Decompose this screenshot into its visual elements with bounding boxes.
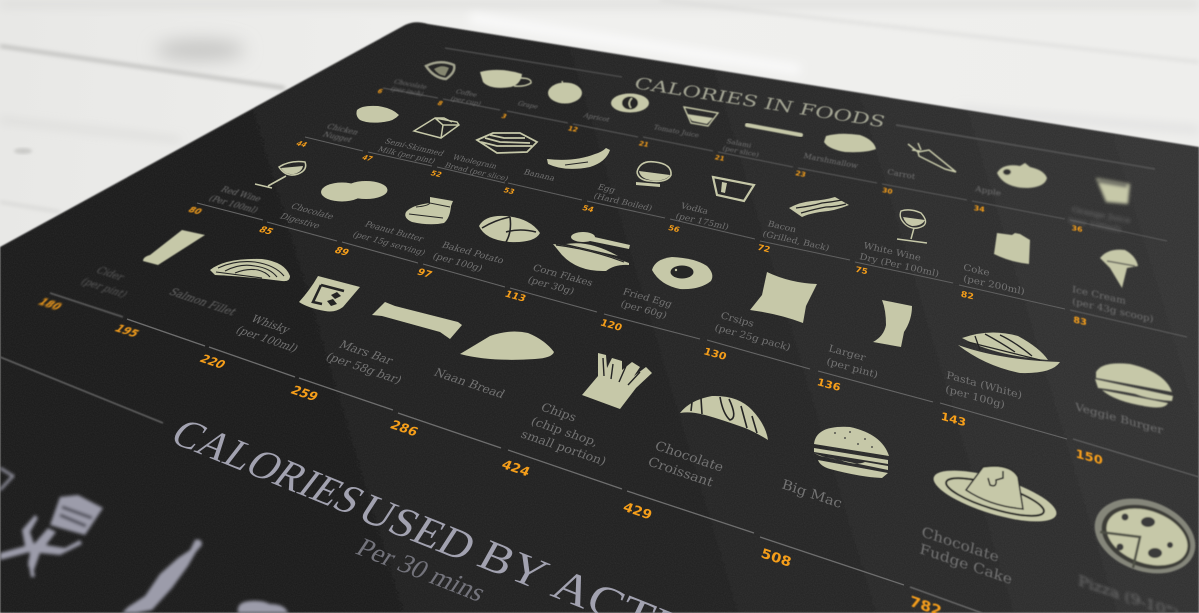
- row 3 calorie values: 120: [598, 318, 624, 334]
- icon: baked potato: [479, 216, 540, 242]
- label: white wine: White Wine: [862, 241, 922, 264]
- label: whisky: Whisky: [248, 313, 294, 336]
- icon: chocolate: [426, 62, 454, 79]
- row 4 calorie values: 220: [197, 352, 229, 371]
- row 1 calorie values: 34: [973, 204, 985, 214]
- label: chicken nugget: Nugget: [321, 130, 355, 144]
- label: bacon: Bacon: [766, 220, 798, 235]
- row 2 calorie values: 52: [429, 169, 444, 179]
- row 4 calorie values: 195: [111, 322, 143, 340]
- heading: calories used by activity: USED: [350, 486, 485, 570]
- icon: big mac: [814, 427, 889, 478]
- icon: carrot: [908, 143, 956, 172]
- icon: vodka glass: [713, 177, 754, 201]
- label: chips: [519, 400, 609, 468]
- row 4 calorie values: 180: [35, 296, 65, 313]
- row 4 calorie values: 286: [387, 418, 420, 440]
- icon: apricot: [611, 94, 649, 112]
- row 3 divider lines: [197, 203, 1199, 477]
- label: chocolate: Chocolate: [392, 78, 429, 91]
- row 4 calorie values: 508: [759, 546, 793, 571]
- row 2 calorie values: 47: [360, 153, 375, 163]
- label: chips: small portion): [519, 427, 609, 468]
- label: red wine: [206, 185, 263, 215]
- icon: office chair: [0, 495, 103, 577]
- label: coffee: Coffee: [454, 88, 479, 99]
- label: bacon: (Grilled, Back): [761, 229, 831, 253]
- row 2 calorie values: [294, 139, 1087, 328]
- label: crisps: (per 25g pack): [713, 323, 792, 353]
- heading: calories in foods: [445, 48, 1155, 169]
- label: cider: Cider: [93, 264, 129, 283]
- icon: activity figure fragment: [238, 601, 288, 613]
- icon: naan bread: [460, 332, 554, 360]
- label: chocolate croissant: [646, 439, 725, 490]
- label: white wine: Dry (Per 100ml): [858, 252, 940, 279]
- icon: veggie burger: [1095, 363, 1173, 408]
- row 3 calorie values: 113: [503, 289, 528, 304]
- icon: crisps packet: [750, 272, 817, 323]
- row 1 calorie values: 30: [882, 186, 893, 196]
- row 2 calorie values: 44: [294, 139, 309, 149]
- icon: pasta: [958, 332, 1060, 373]
- label: baked potato: Baked Potato: [439, 240, 506, 266]
- row 3 calorie values: [185, 206, 1103, 468]
- row 1 calorie values: [376, 88, 1083, 234]
- label: lager: (per pint): [825, 356, 879, 381]
- icon: orange juice glass: [1096, 178, 1130, 204]
- row 3 calorie values: 85: [256, 225, 275, 237]
- label: peanut butter: (per 15g serving): [350, 229, 428, 258]
- label: coffee: [449, 88, 483, 107]
- row 3 calorie values: 130: [702, 346, 728, 363]
- label: vodka: (per 175ml): [674, 211, 731, 232]
- label: salami: Salami: [725, 138, 753, 150]
- row 1 calorie values: 36: [1071, 224, 1083, 234]
- row 1 calorie values: 21: [714, 154, 726, 163]
- label: chips: Chips: [539, 400, 579, 424]
- label: coke: Coke: [963, 263, 990, 279]
- label: ice cream: Ice Cream: [1072, 285, 1126, 307]
- label: corn flakes: Corn Flakes: [531, 263, 595, 289]
- icon: bread stack: [477, 133, 537, 153]
- label: tomato juice: Tomato Juice: [652, 124, 700, 139]
- label: mars bar: Mars Bar: [336, 338, 396, 367]
- label: crisps: Crsips: [719, 311, 755, 330]
- row 2 calorie values: 54: [581, 204, 596, 214]
- icon: red wine: [255, 162, 306, 188]
- label: cider: [78, 264, 131, 300]
- row 4 calorie values: 429: [621, 501, 654, 523]
- label: banana: Banana: [522, 168, 557, 183]
- icon: egg in cup: [636, 162, 671, 187]
- label: naan bread: Naan Bread: [431, 366, 508, 401]
- label: chocolate digestive: Chocolate: [288, 202, 336, 222]
- label: lager: Larger: [827, 343, 867, 364]
- panel: food row 1: [376, 62, 1167, 241]
- label: salami: (per slice): [721, 145, 760, 159]
- label: chocolate croissant: Chocolate: [653, 439, 725, 475]
- icon: coffee cup: [480, 70, 531, 88]
- label: lager: [825, 343, 879, 381]
- row 1 calorie values: 8: [436, 100, 445, 107]
- heading rule: [0, 357, 163, 423]
- label: salmon fillet: Salmon Fillet: [166, 286, 240, 318]
- icon: peanut butter jar: [405, 197, 453, 224]
- icon: desk fragment: [0, 468, 13, 490]
- label: chips: (chip shop,: [529, 414, 601, 449]
- icon: cider glass: [143, 230, 205, 265]
- label: wholegrain bread: Wholegrain: [451, 153, 499, 170]
- label: coke: [963, 263, 1025, 297]
- icon: white wine: [897, 210, 927, 243]
- label: orange juice: [1068, 205, 1131, 234]
- icon: banana: [547, 148, 610, 169]
- label: vodka: Vodka: [678, 202, 710, 217]
- row 1 calorie values: 6: [376, 88, 385, 95]
- label: mars bar: (per 58g bar): [323, 350, 405, 386]
- icon: standing person: [122, 540, 202, 613]
- row 4 calorie values: 259: [287, 384, 321, 405]
- icon: tomato juice: [684, 107, 718, 126]
- label: carrot: Carrot: [887, 168, 917, 181]
- label: chocolate fudge cake: Chocolate: [920, 523, 1000, 566]
- label: fried egg: Fried Egg: [621, 287, 674, 310]
- row 4 calorie values: [35, 296, 943, 613]
- row 2 calorie values: 53: [502, 186, 516, 196]
- panel: calories used by activity: [0, 357, 678, 613]
- label: chocolate digestive: [277, 202, 336, 231]
- row 4 divider lines: [50, 293, 982, 613]
- label: baked potato: [430, 240, 506, 274]
- icon: salami: [747, 125, 801, 135]
- row 2 calorie values: 75: [854, 264, 869, 276]
- heading: calories used by activity: CALORIES: [162, 411, 374, 523]
- heading: calories used by activity: [162, 411, 678, 613]
- label: semi-skimmed milk: [376, 137, 446, 165]
- label: peanut butter: Peanut Butter: [362, 220, 426, 244]
- icon: corn flakes bowl and spoon: [553, 232, 630, 271]
- label: chicken nugget: [321, 122, 361, 144]
- panel: food row 2: [294, 106, 1187, 337]
- label: orange juice: Orange Juice: [1072, 205, 1131, 225]
- icon: apple: [997, 163, 1047, 188]
- row 2 calorie values: 82: [960, 290, 974, 302]
- icon: chips: [582, 353, 652, 409]
- icon: mars bar: [372, 302, 462, 339]
- icon: chocolate digestive: [321, 181, 388, 202]
- label: cider: (per pint): [78, 275, 131, 300]
- label: ice cream: [1072, 285, 1154, 325]
- label: fried egg: [619, 287, 674, 321]
- label: veggie burger: Veggie Burger: [1074, 400, 1164, 437]
- label: big mac: Big Mac: [780, 477, 844, 512]
- label: apple: Apple: [974, 183, 1002, 198]
- label: chocolate croissant: Croissant: [646, 455, 716, 490]
- icon: fried egg: [652, 257, 712, 289]
- label: chocolate digestive: Digestive: [277, 212, 322, 231]
- icon: grape: [548, 81, 582, 104]
- label: ice cream: (per 43g scoop): [1072, 297, 1154, 325]
- row 2 divider lines: [305, 137, 1187, 337]
- label: wholegrain bread: Bread (per slice): [443, 161, 510, 183]
- row 1 calorie values: 3: [500, 112, 508, 120]
- label: baked potato: (per 100g): [430, 251, 485, 274]
- label: grape: Grape: [516, 100, 540, 111]
- label: marshmallow: Marshmallow: [802, 152, 860, 170]
- label: coke: (per 200ml): [963, 274, 1025, 297]
- icon: salmon fillet: [210, 259, 290, 281]
- label: coffee: (per cup): [449, 95, 483, 107]
- label: chocolate fudge cake: Fudge Cake: [918, 540, 1014, 588]
- panel: food row 4: [35, 230, 1199, 613]
- label: semi-skimmed milk: Semi-Skimmed: [383, 137, 446, 158]
- label: pasta: Pasta (White): [946, 369, 1023, 401]
- icon: marshmallow: [824, 134, 876, 152]
- label: egg hard boiled: (Hard Boiled): [592, 191, 654, 213]
- icon: whisky glass: [299, 276, 360, 312]
- row 3 calorie values: 80: [185, 206, 204, 217]
- subheading: per 30 mins: Per 30 mins: [350, 533, 492, 608]
- label: egg hard boiled: Egg: [596, 182, 618, 195]
- row 3 calorie values: 143: [940, 410, 967, 429]
- row 1 calorie values: 21: [637, 140, 650, 149]
- label: corn flakes: (per 30g): [526, 275, 576, 297]
- label: red wine: Red Wine: [218, 185, 263, 204]
- row 3 calorie values: 136: [816, 376, 842, 394]
- icon: coke can: [994, 233, 1030, 264]
- icon: ice cream: [1100, 250, 1138, 288]
- label: fried egg: (per 60g): [619, 299, 668, 321]
- row 1 calorie values: 23: [794, 169, 807, 179]
- label: pasta: (per 100g): [945, 383, 1006, 411]
- row 3 calorie values: 89: [332, 246, 351, 258]
- row 4 calorie values: 424: [499, 458, 532, 480]
- label: semi-skimmed milk: Milk (per pint): [376, 145, 437, 165]
- label: chocolate: (per inch): [389, 85, 426, 98]
- panel: food row 3: [185, 162, 1199, 477]
- icon: chicken nugget: [356, 106, 399, 123]
- row 2 calorie values: 72: [756, 243, 771, 255]
- row 1 calorie values: 12: [566, 125, 580, 134]
- icon: bacon: [789, 197, 849, 217]
- label: chicken nugget: Chicken: [325, 122, 361, 136]
- row 3 calorie values: 97: [415, 267, 434, 280]
- label: red wine: (Per 100ml): [206, 194, 261, 215]
- icon: milk carton: [414, 118, 459, 138]
- row 1 divider lines: [383, 88, 1167, 241]
- label: vodka: [674, 202, 731, 232]
- row 2 calorie values: 83: [1073, 315, 1087, 328]
- label: chocolate: [389, 78, 429, 98]
- icon: croissant: [680, 396, 768, 440]
- label: orange juice: (per 100ml): [1068, 215, 1121, 234]
- row 3 calorie values: 150: [1075, 446, 1103, 468]
- label: salami: [721, 138, 760, 159]
- label: apricot: Apricot: [581, 112, 611, 124]
- label: whisky: (per 100ml): [233, 324, 301, 355]
- heading: calories used by activity: BY: [470, 532, 556, 599]
- icon: pizza: [1084, 485, 1199, 587]
- icon: chocolate fudge cake: [929, 460, 1061, 532]
- row 2 calorie values: 56: [667, 224, 681, 234]
- icon: lager glass: [873, 300, 912, 347]
- heading: calories in foods: CALORIES IN FOODS: [631, 75, 888, 132]
